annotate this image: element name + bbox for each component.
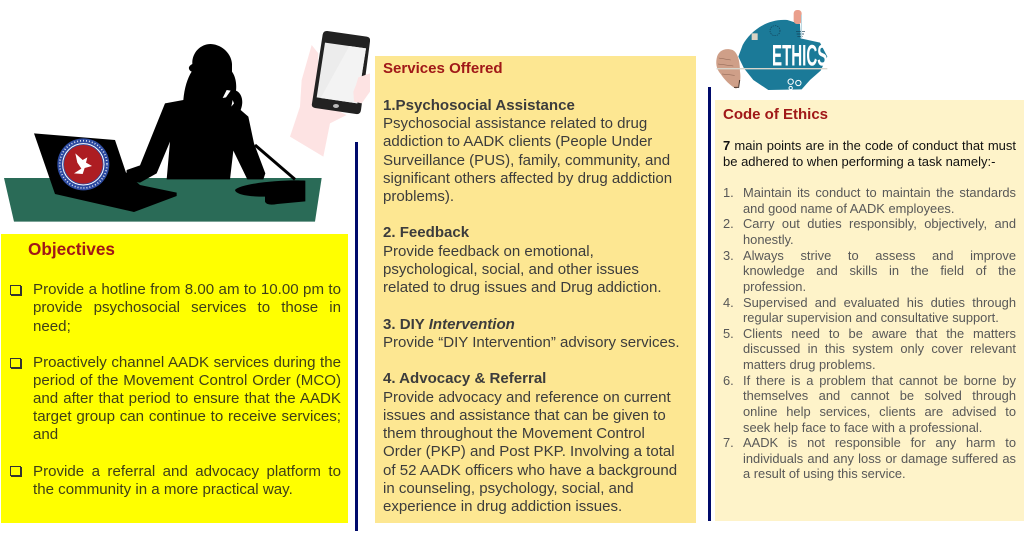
- heading: objectives: Objectives: [28, 239, 115, 259]
- panel: objectives: the community in a more practical way.: [33, 481, 293, 498]
- panel: code of ethics: discussed in this system only cover relevant: [743, 341, 1016, 356]
- flower: [794, 10, 802, 38]
- panel: services offered: issues and assistance that can be given to: [383, 407, 666, 424]
- panel: code of ethics: 2.: [723, 216, 734, 231]
- panel: code of ethics: Always strive to assess and improve: [743, 248, 1016, 263]
- panel: services offered: of 52 AADK officers who have a background: [383, 462, 677, 479]
- panel: objectives: need;: [33, 318, 71, 335]
- panel: services offered: them throughout the Movement Control: [383, 425, 645, 442]
- panel: code of ethics: honestly.: [743, 232, 794, 247]
- panel: code of ethics: 7.: [723, 435, 734, 450]
- panel: services offered: Provide feedback on emotional,: [383, 243, 594, 260]
- icon: AADK logo: [57, 138, 109, 190]
- panel: code of ethics: be adhered to when performing a task namely:-: [723, 154, 995, 169]
- telephone cord: [255, 145, 295, 179]
- panel: services offered: Provide advocacy and reference on current: [383, 389, 671, 406]
- panel: code of ethics: online help services, clients are advised to: [743, 404, 1016, 419]
- illustration: woman on phone at desk with laptop: [4, 31, 370, 222]
- panel: services offered: related to drug issues and Drug addiction.: [383, 279, 662, 296]
- panel: services offered: significant others affected by drug addiction: [383, 170, 672, 187]
- heading: code of ethics: Code of Ethics: [723, 106, 828, 123]
- blue blob: [738, 20, 827, 90]
- panel: code of ethics: Clients need to be aware that the matters: [743, 326, 1016, 341]
- panel: code of ethics: and good name of AADK employees.: [743, 201, 954, 216]
- panel: services offered: in counseling, psychology, social, and: [383, 480, 634, 497]
- text: feedback: [383, 224, 662, 296]
- desk: [4, 178, 322, 222]
- panel: objectives: Provide a referral and advocacy platform to: [33, 463, 341, 480]
- panel: code of ethics: 7 main points are in the code of conduct that must: [723, 138, 1016, 153]
- icon: hand holding smartphone: [290, 31, 370, 157]
- panel: services offered: 4. Advocacy & Referral: [383, 370, 546, 387]
- panel: code of ethics: AADK is not responsible for any harm to: [743, 435, 1016, 450]
- panel: services offered: Surveillance (PUS), family, community, and: [383, 152, 670, 169]
- small icons in blob: [752, 26, 805, 40]
- panel: objectives: target group can continue to receive services;: [33, 408, 341, 425]
- panel: code of ethics: 3.: [723, 248, 734, 263]
- panel: code of ethics: Maintain its conduct to maintain the standards: [743, 185, 1016, 200]
- icon: ETHICS image with hand: [716, 10, 828, 90]
- panel: services offered: 2. Feedback: [383, 224, 469, 241]
- divider line: left: [355, 142, 358, 531]
- panel: code of ethics: 1.: [723, 185, 734, 200]
- panel: code of ethics: a result of using this service.: [743, 466, 906, 481]
- divider line: right: [708, 87, 711, 521]
- panel: services offered: problems).: [383, 188, 454, 205]
- list: seven points: [723, 185, 1016, 481]
- panel: code of ethics: profession.: [743, 279, 806, 294]
- icon: earpiece highlights: [223, 90, 234, 107]
- panel: code of ethics: 6.: [723, 373, 734, 388]
- panel: objectives: Provide a hotline from 8.00 am to 10.00 pm to: [33, 281, 341, 298]
- text: advocacy and referral: [383, 370, 677, 515]
- text: introduction: [723, 138, 1016, 169]
- text: DIY intervention: [383, 316, 680, 351]
- panel: code of ethics: 5.: [723, 326, 734, 341]
- panel: code of ethics: If there is a problem that cannot be borne by: [743, 373, 1016, 388]
- panel: services offered: Order (PKP) and Post PKP. Involving a total: [383, 443, 675, 460]
- panel: code of ethics: themselves and cannot be solved through: [743, 388, 1016, 403]
- heading: services offered: Services Offered: [383, 60, 503, 77]
- panel: objectives: period of the Movement Control Order (MCO): [33, 372, 341, 389]
- panel: services offered: addiction to AADK clients (People Under: [383, 133, 652, 150]
- panel: code of ethics: 4.: [723, 295, 734, 310]
- panel: services offered: 3. DIY Intervention: [383, 316, 515, 333]
- panel: services offered: Psychosocial assistance related to drug: [383, 115, 647, 132]
- panel: code of ethics: Carry out duties responsibly, objectively, and: [743, 216, 1016, 231]
- panel: code of ethics: regular supervision and consultative support.: [743, 310, 999, 325]
- text: psychosocial assistance: [383, 97, 672, 205]
- panel: services offered: psychological, social, and other issues: [383, 261, 639, 278]
- silhouette: woman: [126, 44, 265, 183]
- panel: services offered: Provide “DIY Intervention” advisory services.: [383, 334, 680, 351]
- panel: code of ethics: individuals and any loss or damage suffered as: [743, 451, 1016, 466]
- laptop: [34, 133, 177, 212]
- panel: code of ethics: knowledge and skills in the field of the: [743, 263, 1016, 278]
- gears: [788, 79, 801, 90]
- panel: code of ethics: Supervised and evaluated his duties through: [743, 295, 1016, 310]
- panel: objectives: and: [33, 426, 58, 443]
- panel: objectives: Proactively channel AADK services during the: [33, 354, 341, 371]
- panel: code of ethics: seek help face to face with a professional.: [743, 420, 982, 435]
- panel: code of ethics: matters drug problems.: [743, 357, 876, 372]
- panel: objectives: and after that period to ensure that the AADK: [33, 390, 341, 407]
- hand: [716, 49, 740, 89]
- panel: objectives: provide psychosocial services to those in: [33, 299, 341, 316]
- underline stroke: [717, 67, 827, 71]
- panel: services offered: experience in drug addiction issues.: [383, 498, 622, 515]
- panel: services offered: 1.Psychosocial Assistance: [383, 97, 575, 114]
- icon: desk telephone: [235, 180, 305, 205]
